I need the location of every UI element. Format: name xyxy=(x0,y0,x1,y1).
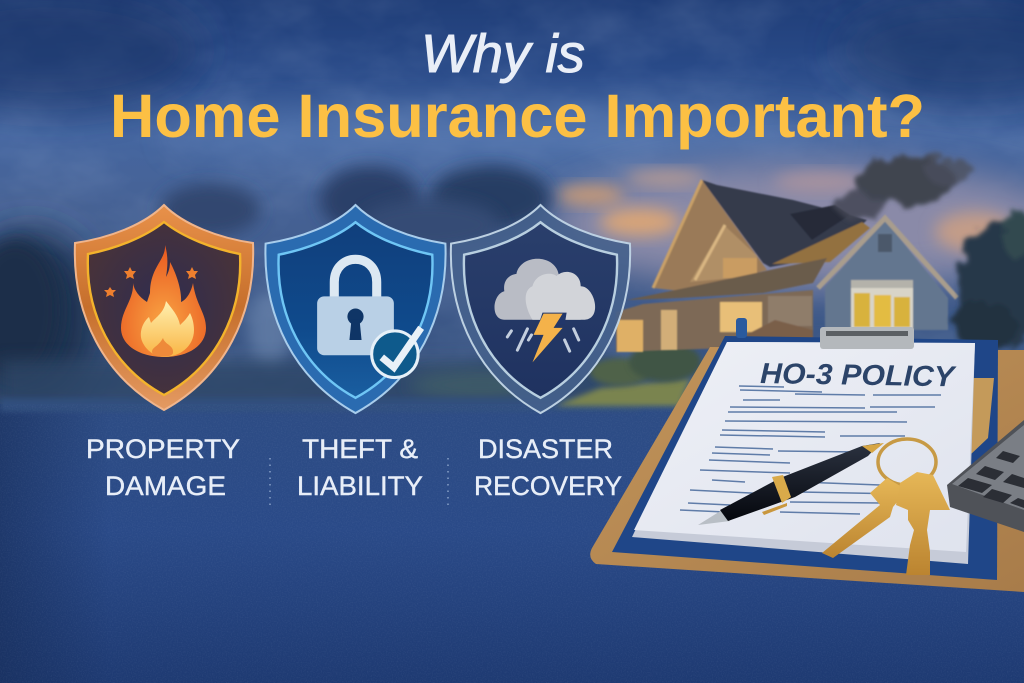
icon: sparks xyxy=(104,267,198,297)
sunset glow in the sky xyxy=(550,163,1024,287)
title line 2: Home Insurance Important? xyxy=(110,82,925,150)
icon: lightning bolt xyxy=(532,314,563,362)
clipboard xyxy=(590,318,1024,592)
house: lower wall xyxy=(616,290,813,352)
keys on ring xyxy=(822,439,950,575)
shield: disaster recovery xyxy=(451,205,630,413)
house: right gable with blue siding xyxy=(825,220,948,330)
pen xyxy=(698,443,884,525)
clipboard: paper stack xyxy=(632,342,975,564)
icon: rain xyxy=(507,329,579,351)
house: burnt roof xyxy=(702,180,867,267)
clipboard: wood board xyxy=(590,347,1024,592)
label: theft and liability: THEFT & xyxy=(302,434,418,464)
icon: padlock xyxy=(317,259,394,355)
background: tree line xyxy=(0,166,620,410)
house: main gable xyxy=(653,180,767,292)
label: theft and liability: LIABILITY xyxy=(297,471,423,501)
heading xyxy=(110,24,925,150)
key: angled xyxy=(822,478,907,558)
policy text lines xyxy=(680,386,941,514)
title line 1: Why is xyxy=(421,24,585,84)
label: disaster recovery: RECOVERY xyxy=(474,471,622,501)
icon: check badge xyxy=(372,328,421,378)
table with wood surface xyxy=(950,352,1024,585)
house with damaged roof xyxy=(616,180,957,352)
label: property damage xyxy=(86,434,240,501)
shield: property damage xyxy=(75,205,253,410)
label: property damage: PROPERTY xyxy=(86,434,240,464)
clipboard: blue backing xyxy=(612,336,998,580)
label: theft and liability xyxy=(297,434,423,501)
clipboard: metal clip xyxy=(820,327,914,349)
trees right xyxy=(953,211,1024,349)
shrubs and lawn xyxy=(555,342,701,406)
icon: flame xyxy=(121,245,206,357)
clipboard: paper sheet xyxy=(634,342,975,552)
smoke above roof xyxy=(834,156,974,219)
shield: theft and liability xyxy=(265,205,446,413)
clipboard: wood strip xyxy=(950,378,994,474)
label: disaster recovery: DISASTER xyxy=(478,434,613,464)
key: upright xyxy=(896,472,950,575)
calculator xyxy=(947,420,1024,532)
road / lower background xyxy=(0,398,1024,683)
policy title: HO-3 POLICY xyxy=(760,358,957,393)
label: property damage: DAMAGE xyxy=(105,471,226,501)
label: disaster recovery xyxy=(474,434,622,501)
clipboard: blue peg xyxy=(736,318,747,338)
icon: storm cloud xyxy=(495,259,595,325)
